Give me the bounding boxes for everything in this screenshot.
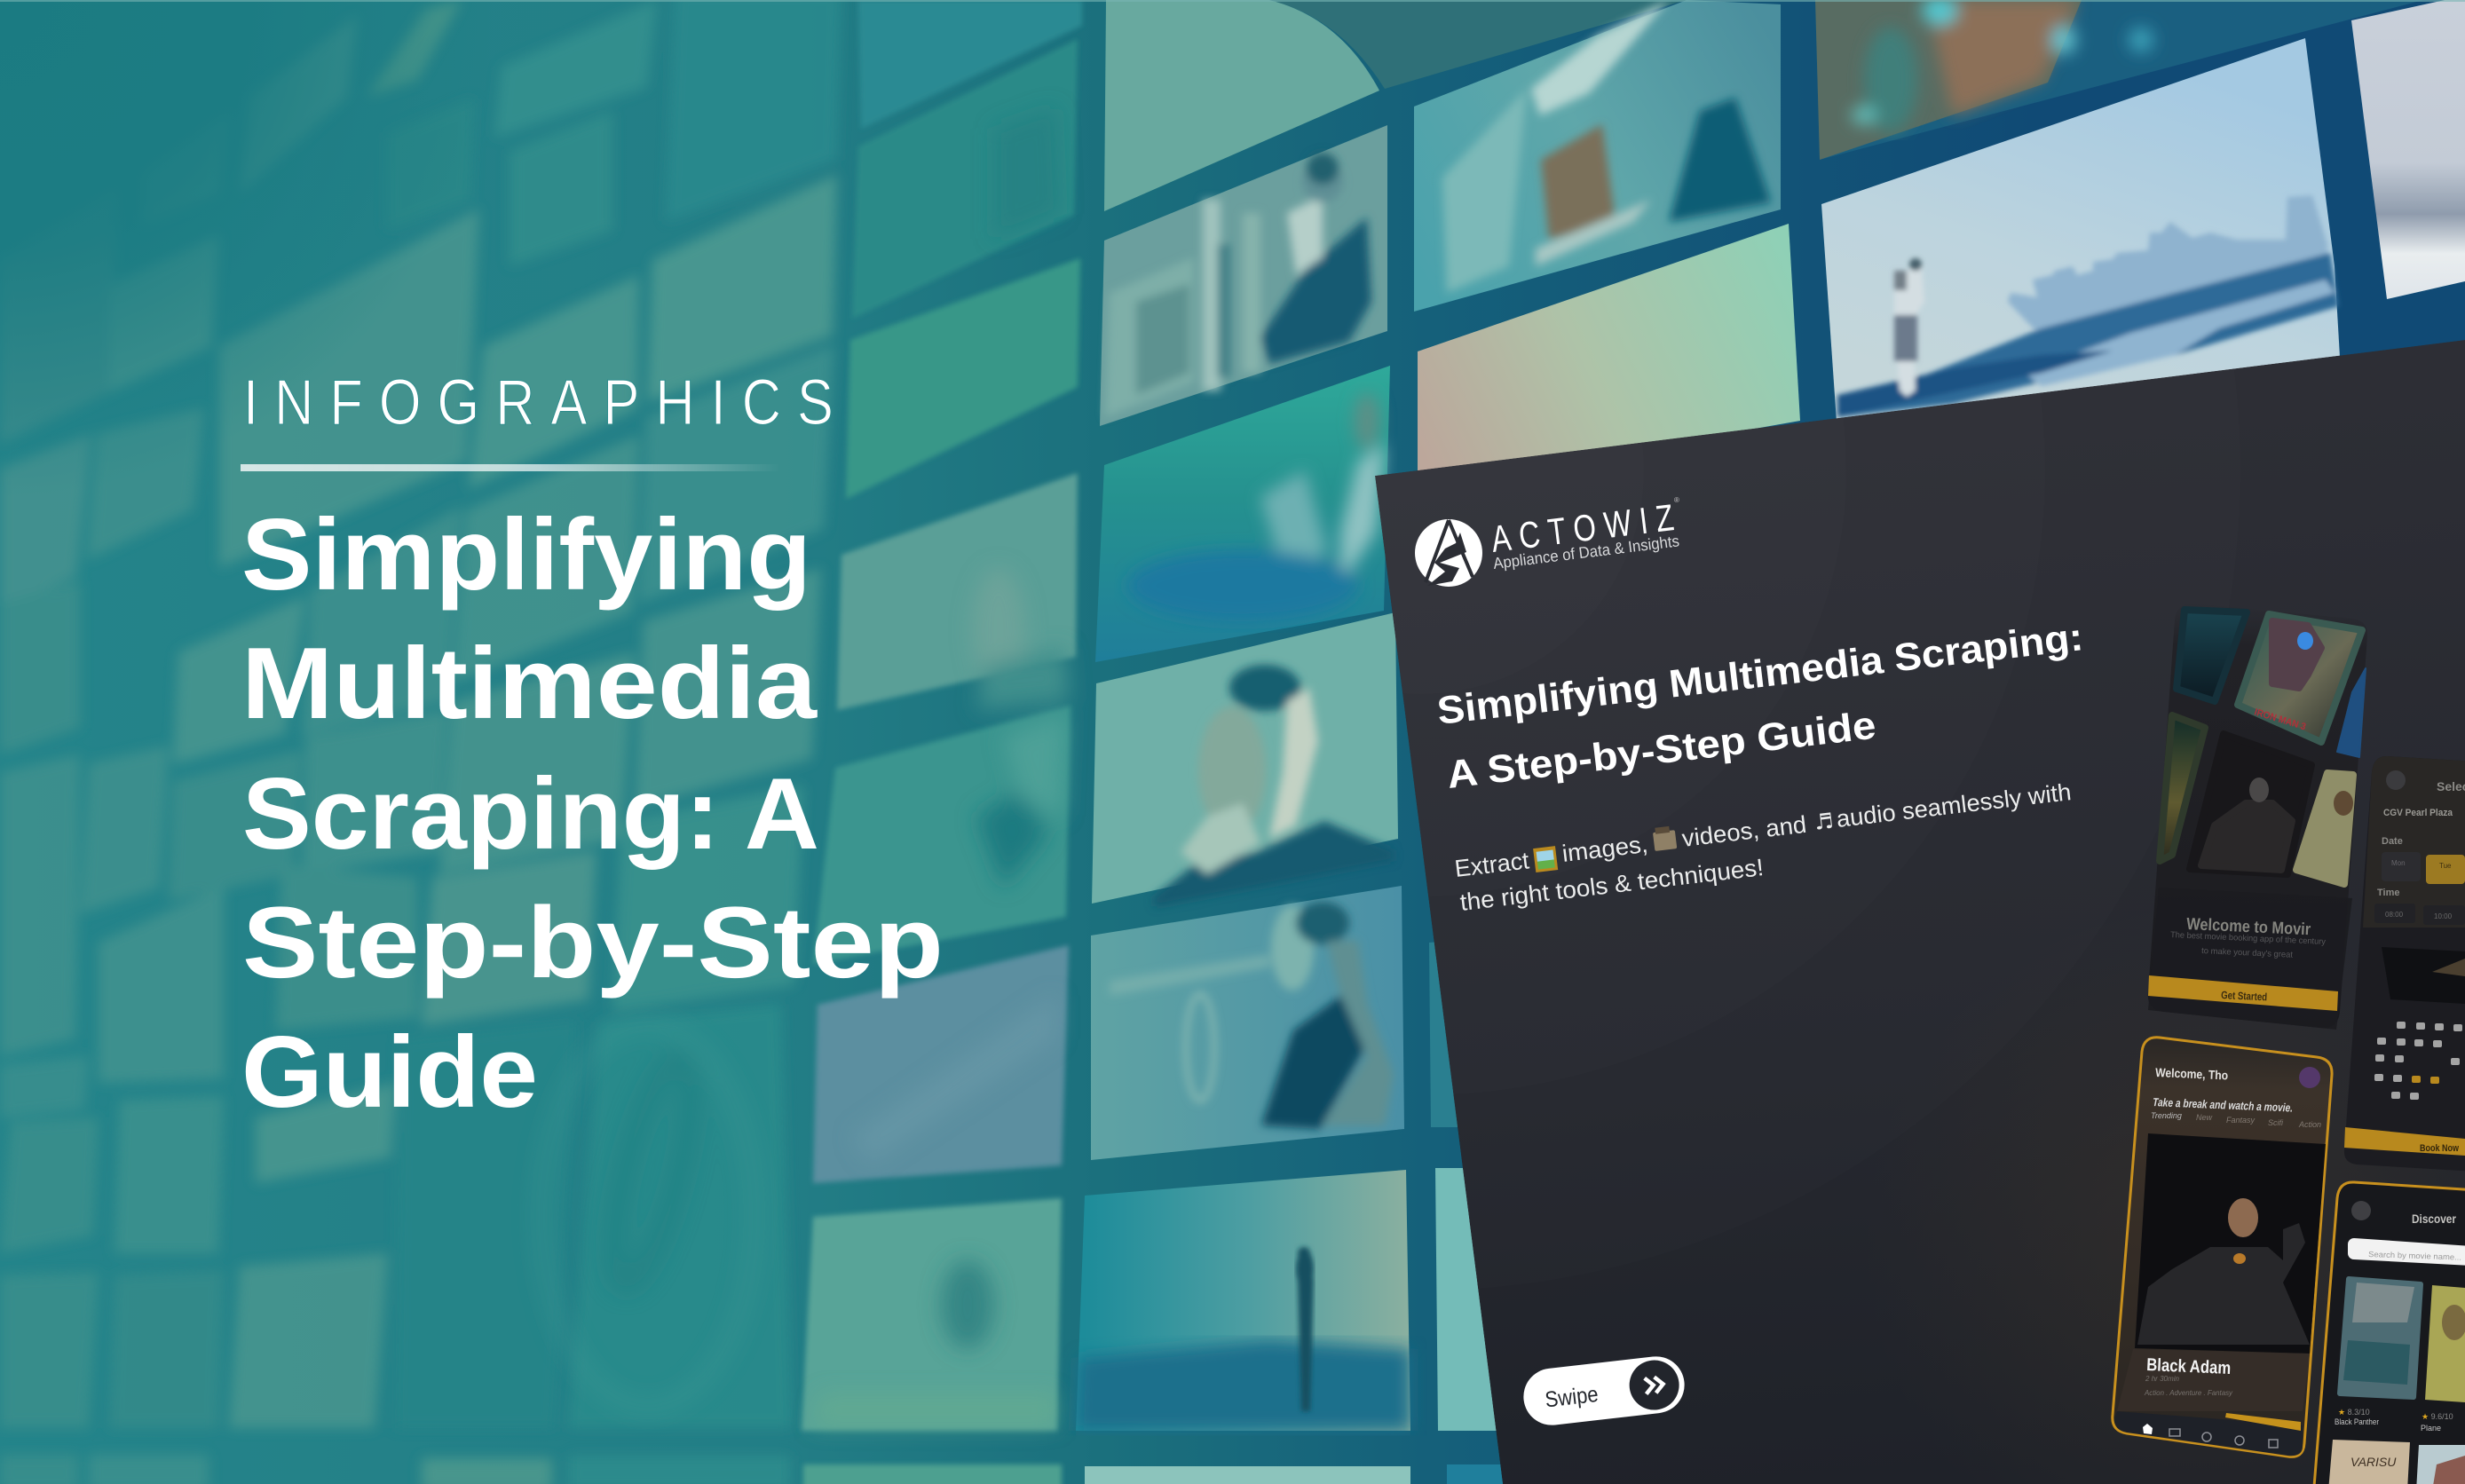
- phone mockup: Black Adam home: [2113, 1038, 2332, 1456]
- icon: double chevron: [1645, 1376, 1664, 1394]
- genre tabs: [2151, 1111, 2321, 1129]
- registered mark: ®: [1674, 496, 1679, 504]
- label: INFOGRAPHICS: INFOGRAPHICS: [243, 367, 849, 438]
- tile: top mosaic: [1815, 0, 2423, 160]
- button: Get Started: [2148, 975, 2338, 1011]
- movie posters: [2160, 610, 2366, 884]
- tile: dark mottled top: [1269, 0, 1687, 89]
- icon: framed picture: [1533, 846, 1558, 872]
- poster meta: 2 hr 30min: [2145, 1374, 2179, 1383]
- back button: [2386, 770, 2406, 790]
- featured poster: [2135, 1133, 2326, 1354]
- tile details: column four figures: [812, 107, 1070, 1427]
- slide subheading with media icons: audio seamlessly with: [1835, 778, 2073, 833]
- seat map: [2374, 1022, 2462, 1100]
- slide subheading with media icons: [1453, 778, 2073, 916]
- seat screen text: CGV Pearl Plaza: [2383, 808, 2453, 818]
- slide heading: [1439, 628, 2081, 788]
- back button: [2351, 1201, 2371, 1220]
- genre tabs: Scifi: [2268, 1118, 2284, 1127]
- tile: man in suit: [1100, 125, 1387, 426]
- avatar: [2299, 1067, 2320, 1088]
- tile: woman in dark top: [1091, 886, 1404, 1160]
- logo wordmark: ACTOWIZ: [1489, 495, 1684, 560]
- phone mockup: Welcome to Movir: Get Started: [2221, 989, 2267, 1003]
- poster meta: [2144, 1374, 2233, 1397]
- tagline: Take a break and watch a movie.: [2153, 1095, 2293, 1115]
- screen title: Discover: [2412, 1212, 2456, 1226]
- slide subheading with media icons: Extract: [1453, 847, 1531, 882]
- movie posters: [2328, 1279, 2465, 1484]
- greeting: Welcome, Tho: [2155, 1065, 2228, 1082]
- concentric background arcs: [600, 0, 2240, 1291]
- movie ratings and names: ★ 8.3/10: [2338, 1408, 2370, 1417]
- tile: pale right screen: [2351, 0, 2465, 299]
- tile: hands over chess board: [1414, 0, 1781, 312]
- poster title: Black Adam: [2146, 1355, 2232, 1378]
- movie ratings and names: ★ 9.6/10: [2422, 1412, 2453, 1421]
- tile: woman with headphones: [1092, 612, 1398, 907]
- slide heading: A Step-by-Step Guide: [1444, 704, 1878, 797]
- cinema screen image: [2382, 947, 2465, 1004]
- video wall tiles: column five: [1076, 0, 1687, 1484]
- tile: blue and green scene: [1095, 366, 1390, 662]
- movie ratings and names: Plane: [2421, 1424, 2441, 1433]
- slide subheading with media icons: the right tools & techniques!: [1458, 854, 1765, 916]
- slide subheading with media icons: videos, and: [1680, 811, 1808, 852]
- video wall tiles: right of column five: [1411, 0, 2465, 1484]
- tile: bottom strip: [1085, 1466, 1410, 1484]
- logo tagline: Appliance of Data & Insights: [1492, 532, 1680, 572]
- big round tile ring: [541, 1025, 755, 1407]
- movie ratings and names: Black Panther: [2335, 1417, 2379, 1426]
- slide heading: Simplifying Multimedia Scraping:: [1435, 615, 2085, 733]
- seat screen text: [2377, 779, 2465, 898]
- genre tabs: New: [2196, 1113, 2213, 1122]
- main title: [241, 499, 944, 1129]
- logo: Actowiz: [1415, 495, 1684, 587]
- date chips: [2382, 852, 2465, 884]
- search field: Search by movie name...: [2368, 1250, 2461, 1262]
- poster meta: Action . Adventure . Fantasy: [2144, 1388, 2233, 1397]
- button: swipe pill: [1523, 1356, 1685, 1425]
- tile: plain top: [1104, 0, 1379, 211]
- main title: Step-by-Step: [242, 887, 944, 999]
- panel: tilted dark slide: [1375, 340, 2465, 1484]
- main title: Simplifying: [241, 499, 811, 612]
- slide subheading with media icons: images,: [1560, 831, 1649, 867]
- main title: Multimedia: [241, 628, 818, 740]
- onboarding description: [2170, 930, 2326, 960]
- time chips: 10:00: [2434, 912, 2453, 920]
- tile: sky and city: [1821, 38, 2343, 422]
- top edge line: [0, 0, 2465, 2]
- date chips: Mon: [2391, 859, 2406, 867]
- time chips: 08:00: [2385, 911, 2404, 919]
- featured info panel: [2117, 1349, 2310, 1411]
- onboarding title: Welcome to Movir: [2186, 915, 2311, 939]
- genre tabs: Trending: [2151, 1111, 2182, 1120]
- divider rule under label: [241, 464, 782, 471]
- icon: music note: ♬: [1813, 809, 1835, 835]
- icon: film projector: [1652, 825, 1677, 851]
- tile: figure on shore: [1076, 1170, 1410, 1431]
- swipe label: Swipe: [1544, 1382, 1600, 1412]
- seat screen text: Date: [2382, 836, 2403, 847]
- movie posters: VARISU: [2350, 1455, 2397, 1469]
- main title: Scraping: A: [242, 758, 819, 871]
- phone mockup: Welcome to Movir: [2148, 604, 2367, 1030]
- onboarding description: The best movie booking app of the century: [2170, 930, 2326, 947]
- search field: [2354, 1244, 2465, 1262]
- button: Book Now: [2344, 1127, 2465, 1156]
- movie ratings and names: [2335, 1408, 2453, 1433]
- bottom nav bar: [2114, 1411, 2303, 1456]
- genre tabs: Fantasy: [2226, 1116, 2256, 1125]
- tile: rainbow abstract: [1418, 224, 1800, 488]
- seat screen text: Time: [2377, 888, 2399, 898]
- onboarding description: to make your day's great: [2201, 946, 2294, 960]
- poster title: Iron Man 3: IRON MAN 3: [2253, 706, 2307, 732]
- video wall tiles: far left columns: [0, 0, 841, 1484]
- time chips: [2374, 904, 2465, 925]
- main title: Guide: [241, 1016, 538, 1129]
- phone mockup: seat selection: [2344, 756, 2465, 1172]
- date chips: Tue: [2439, 862, 2452, 870]
- video wall tiles: column four: [802, 0, 1082, 1484]
- genre tabs: Action: [2298, 1120, 2321, 1129]
- logo mark: [1415, 519, 1482, 587]
- phone mockup: Discover: [2312, 1182, 2465, 1484]
- top-left corner fade: [0, 0, 621, 621]
